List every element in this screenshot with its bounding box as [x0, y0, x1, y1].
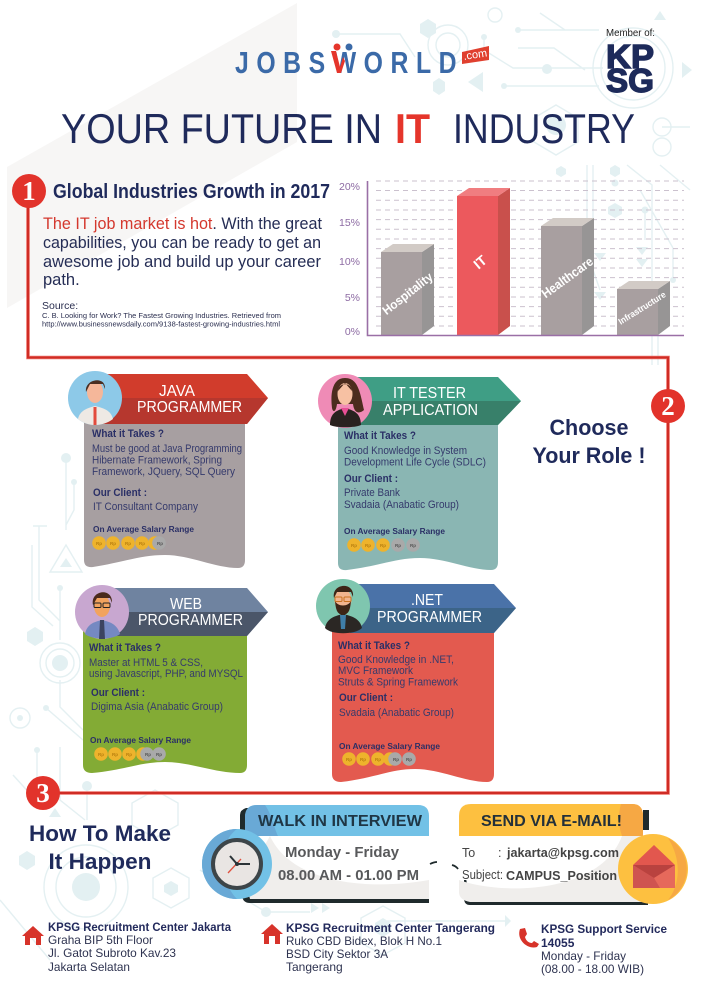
- card: IT tester application: Our Client :: [344, 473, 398, 485]
- salary coins: IT tester: Rp: [410, 543, 416, 548]
- icon: clock: [202, 829, 272, 899]
- address: Jakarta: [22, 920, 231, 974]
- card: IT tester application: [318, 374, 521, 570]
- address: Tangerang: KPSG Recruitment Center Tangerang: [286, 921, 495, 935]
- card: .NET programmer: What it Takes ?: [338, 640, 410, 652]
- bar chart: global industries growth: 15%: [339, 217, 360, 229]
- panel: send via e-mail: Subject:: [462, 868, 503, 882]
- heading: choose your role: [532, 415, 646, 468]
- salary coins: Java: Rp: [139, 541, 145, 546]
- card: IT tester application: On Average Salary Range: [344, 527, 446, 536]
- source note: C. B. Looking for Work? The Fastest Growing Industries. Retrieved from: [42, 311, 281, 320]
- panel: send via e-mail: To: [462, 846, 475, 860]
- card: IT tester application: APPLICATION: [383, 402, 478, 419]
- card: IT tester application: Svadaia (Anabatic Group): [344, 499, 459, 511]
- salary coins: Web: Rp: [145, 752, 151, 757]
- card: IT tester application: IT TESTER: [393, 385, 466, 402]
- card: .NET programmer: [316, 579, 516, 782]
- address: Tangerang: Ruko CBD Bidex, Blok H No.1: [286, 934, 442, 948]
- salary coins: Web: Rp: [126, 752, 132, 757]
- source note: http://www.businessnewsdaily.com/9138-fastest-growing-industries.html: [42, 320, 280, 328]
- salary coins: .NET: Rp: [393, 757, 399, 762]
- logo: JobsWorld: JOBSWORLD: [235, 45, 457, 80]
- panel: send via e-mail: SEND VIA E-MAIL!: [481, 813, 622, 830]
- logo: member of KPSG: [606, 27, 655, 99]
- salary coins: Web: Rp: [112, 752, 118, 757]
- salary coins: Java: Rp: [125, 541, 131, 546]
- bar: Healthcare: Healthcare: [539, 254, 596, 301]
- salary coins: Java: [92, 536, 166, 550]
- support contact: KPSG Support Service: [541, 922, 667, 936]
- card: Java programmer: [68, 371, 268, 568]
- panel: send via e-mail: jakarta@kpsg.com: [506, 845, 619, 860]
- card: Web programmer: [75, 585, 268, 773]
- panel: send via e-mail: [459, 804, 688, 905]
- salary coins: .NET: [342, 752, 416, 766]
- card: Web programmer: WEB: [170, 596, 202, 613]
- connector marks: [430, 862, 458, 869]
- card: Web programmer: What it Takes ?: [89, 642, 161, 654]
- card: Java programmer: Framework, JQuery, SQL Query: [92, 466, 235, 478]
- card: Java programmer: JAVA: [159, 383, 195, 400]
- address: Tangerang: Tangerang: [286, 960, 343, 974]
- panel: walk in interview: 08.00 AM - 01.00 PM: [278, 867, 419, 884]
- heading: how to make it happen: [29, 821, 171, 874]
- source note: [42, 300, 281, 328]
- salary coins: Web: Rp: [98, 752, 104, 757]
- salary coins: Java: Rp: [157, 541, 163, 546]
- card: .NET programmer: MVC Framework: [338, 665, 413, 677]
- bar: Healthcare: [539, 218, 596, 335]
- section 1 paragraph: path.: [43, 271, 80, 289]
- card: .NET programmer: PROGRAMMER: [377, 609, 482, 626]
- heading: how to make it happen: It Happen: [48, 849, 152, 874]
- card: Java programmer: Must be good at Java Programming: [92, 443, 242, 455]
- card: Java programmer: Hibernate Framework, Spring: [92, 454, 222, 466]
- section 2 number badge: [651, 389, 685, 423]
- card: IT tester application: What it Takes ?: [344, 430, 416, 442]
- salary coins: Web: [94, 747, 166, 761]
- card: Web programmer: Digima Asia (Anabatic Group): [91, 701, 223, 713]
- logo: member of KPSG: Member of:: [606, 27, 655, 39]
- address: Jakarta: KPSG Recruitment Center Jakarta: [48, 920, 231, 934]
- section 1 number badge: 1: [22, 176, 36, 206]
- bar: IT: IT: [470, 252, 490, 272]
- support contact: [519, 922, 667, 976]
- logo: member of KPSG: KP: [606, 38, 654, 75]
- title: INDUSTRY: [453, 105, 635, 152]
- section 1 heading: Global Industries Growth in 2017: [53, 181, 330, 203]
- panel: send via e-mail: :: [498, 846, 501, 860]
- card: .NET programmer: Struts & Spring Framework: [338, 676, 458, 688]
- connector frame: [28, 205, 668, 793]
- card: Web programmer: On Average Salary Range: [90, 736, 192, 745]
- icon: phone: [519, 928, 539, 948]
- card: .NET programmer: Our Client :: [339, 692, 393, 704]
- section 1 paragraph: [43, 215, 322, 289]
- bar chart: global industries growth: 10%: [339, 256, 360, 268]
- salary coins: IT tester: Rp: [380, 543, 386, 548]
- card: IT tester application: Good Knowledge in System: [344, 445, 467, 457]
- panel: walk in interview: WALK IN INTERVIEW: [258, 813, 423, 830]
- bar chart: global industries growth: [339, 181, 684, 338]
- bar: Infrastructure: Infrastructure: [616, 289, 668, 327]
- salary coins: Java: Rp: [96, 541, 102, 546]
- source note: Source:: [42, 300, 78, 312]
- bar: Hospitality: Hospitality: [380, 270, 436, 318]
- title: IT: [395, 105, 430, 152]
- section 2 number badge: 2: [661, 391, 675, 421]
- card: Java programmer: On Average Salary Range: [93, 525, 195, 534]
- heading: choose your role: Choose: [550, 415, 628, 440]
- bar chart: global industries growth: 0%: [345, 326, 360, 338]
- card: .NET programmer: Svadaia (Anabatic Group): [339, 707, 454, 719]
- panel: send via e-mail: CAMPUS_Position: [506, 868, 617, 883]
- section 1 paragraph: capabilities, you can be ready to get an: [43, 234, 321, 252]
- title: [61, 105, 635, 152]
- salary coins: Java: Rp: [110, 541, 116, 546]
- support contact: 14055: [541, 936, 575, 950]
- address: Tangerang: BSD City Sektor 3A: [286, 947, 388, 961]
- salary coins: .NET: Rp: [375, 757, 381, 762]
- card: .NET programmer: On Average Salary Range: [339, 742, 441, 751]
- address: Jakarta: Jl. Gatot Subroto Kav.23: [48, 946, 176, 960]
- heading: how to make it happen: How To Make: [29, 821, 171, 846]
- salary coins: IT tester: [347, 538, 420, 552]
- card: .NET programmer: Good Knowledge in .NET,: [338, 654, 454, 666]
- heading: choose your role: Your Role !: [532, 443, 646, 468]
- icon: house: [22, 926, 44, 945]
- icon: envelope: [618, 834, 688, 904]
- support contact: Monday - Friday: [541, 949, 626, 963]
- salary coins: .NET: Rp: [406, 757, 412, 762]
- section 1 paragraph: The IT job market is hot. With the great: [43, 215, 322, 233]
- section 1 number badge: [12, 174, 46, 208]
- title: YOUR FUTURE IN: [61, 105, 382, 152]
- bar chart: global industries growth: 5%: [345, 292, 360, 304]
- section 3 number badge: 3: [36, 778, 50, 808]
- salary coins: IT tester: Rp: [351, 543, 357, 548]
- section 3 number badge: [26, 776, 60, 810]
- card: Web programmer: Our Client :: [91, 687, 145, 699]
- address: Tangerang: [261, 921, 495, 974]
- salary coins: .NET: Rp: [360, 757, 366, 762]
- card: Java programmer: IT Consultant Company: [93, 501, 198, 513]
- card: Web programmer: using Javascript, PHP, and MYSQL: [89, 668, 243, 680]
- avatar: .NET programmer: [316, 579, 370, 633]
- card: Java programmer: PROGRAMMER: [137, 399, 242, 416]
- bar: Hospitality: [380, 244, 436, 335]
- section 1 paragraph: awesome job and build up your career: [43, 253, 321, 271]
- card: Java programmer: What it Takes ?: [92, 428, 164, 440]
- avatar: Java programmer: [68, 371, 122, 425]
- avatar: IT tester: [318, 374, 372, 428]
- logo: member of KPSG: SG: [606, 62, 654, 99]
- card: Web programmer: PROGRAMMER: [138, 612, 243, 629]
- card: .NET programmer: .NET: [411, 592, 443, 609]
- salary coins: IT tester: Rp: [365, 543, 371, 548]
- salary coins: IT tester: Rp: [395, 543, 401, 548]
- card: IT tester application: Private Bank: [344, 487, 400, 499]
- card: IT tester application: Development Life Cycle (SDLC): [344, 456, 486, 468]
- support contact: (08.00 - 18.00 WIB): [541, 962, 644, 976]
- avatar: Web programmer: [75, 585, 129, 639]
- panel: walk in interview: [202, 805, 429, 903]
- salary coins: .NET: Rp: [346, 757, 352, 762]
- card: Java programmer: Our Client :: [93, 487, 147, 499]
- bar: IT: [457, 188, 510, 335]
- icon: house: [261, 924, 283, 944]
- card: Web programmer: Master at HTML 5 & CSS,: [89, 657, 203, 669]
- logo: JobsWorld: .com: [463, 47, 488, 63]
- bar chart: global industries growth: 20%: [339, 181, 360, 193]
- address: Jakarta: Jakarta Selatan: [48, 960, 130, 974]
- salary coins: Web: Rp: [156, 752, 162, 757]
- address: Jakarta: Graha BIP 5th Floor: [48, 933, 153, 947]
- panel: walk in interview: Monday - Friday: [285, 844, 400, 861]
